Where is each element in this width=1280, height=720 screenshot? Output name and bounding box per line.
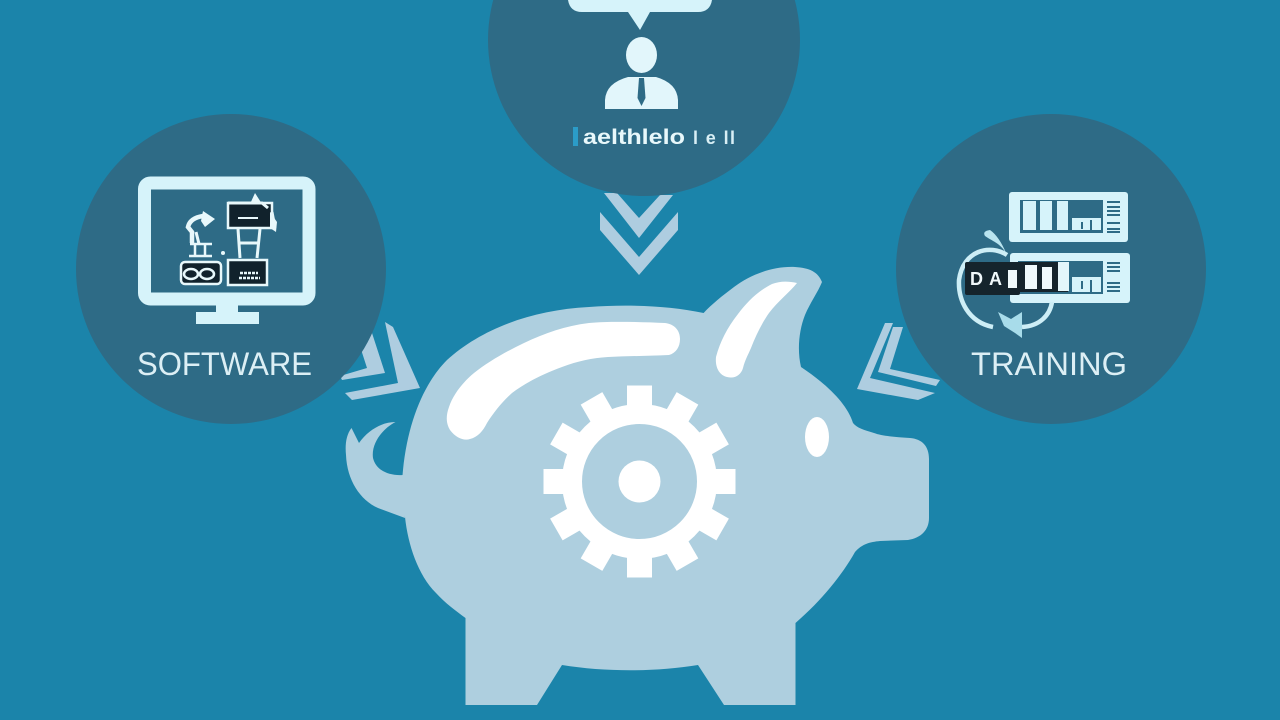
icon: gear bbox=[544, 386, 736, 578]
piggy tail bbox=[346, 422, 405, 518]
icon: workflow diagram bbox=[181, 203, 275, 285]
text: data label tag bbox=[965, 262, 1069, 295]
panel: software circle bbox=[76, 114, 386, 424]
panel: top circle bbox=[488, 0, 800, 196]
arrow: right chevrons bbox=[857, 323, 940, 400]
text: training label: TRAINING bbox=[971, 346, 1127, 382]
icon: apple outline bbox=[959, 230, 1052, 338]
panel: training circle bbox=[896, 114, 1206, 424]
arrow: left chevrons bbox=[340, 322, 420, 400]
icon: person with tie bbox=[605, 37, 678, 109]
icon: speech bubble bbox=[568, 0, 712, 30]
text: garbled label: aelthlelo bbox=[583, 126, 685, 149]
text: software label: SOFTWARE bbox=[137, 346, 312, 382]
icon: server panel bottom bbox=[1010, 253, 1130, 303]
arrow: top chevrons bbox=[600, 193, 678, 275]
icon: computer monitor bbox=[144, 183, 309, 324]
piggy body bbox=[402, 267, 929, 705]
piggy back highlight bbox=[447, 322, 680, 440]
text: garbled label: l e ll bbox=[693, 128, 735, 148]
piggy eye bbox=[805, 417, 829, 457]
icon: piggy bank bbox=[346, 267, 929, 705]
text: data label tag: DA bbox=[970, 269, 1002, 289]
icon: server panel top bbox=[1009, 192, 1128, 242]
piggy ear highlight bbox=[716, 282, 797, 378]
text: garbled label bbox=[573, 126, 735, 149]
